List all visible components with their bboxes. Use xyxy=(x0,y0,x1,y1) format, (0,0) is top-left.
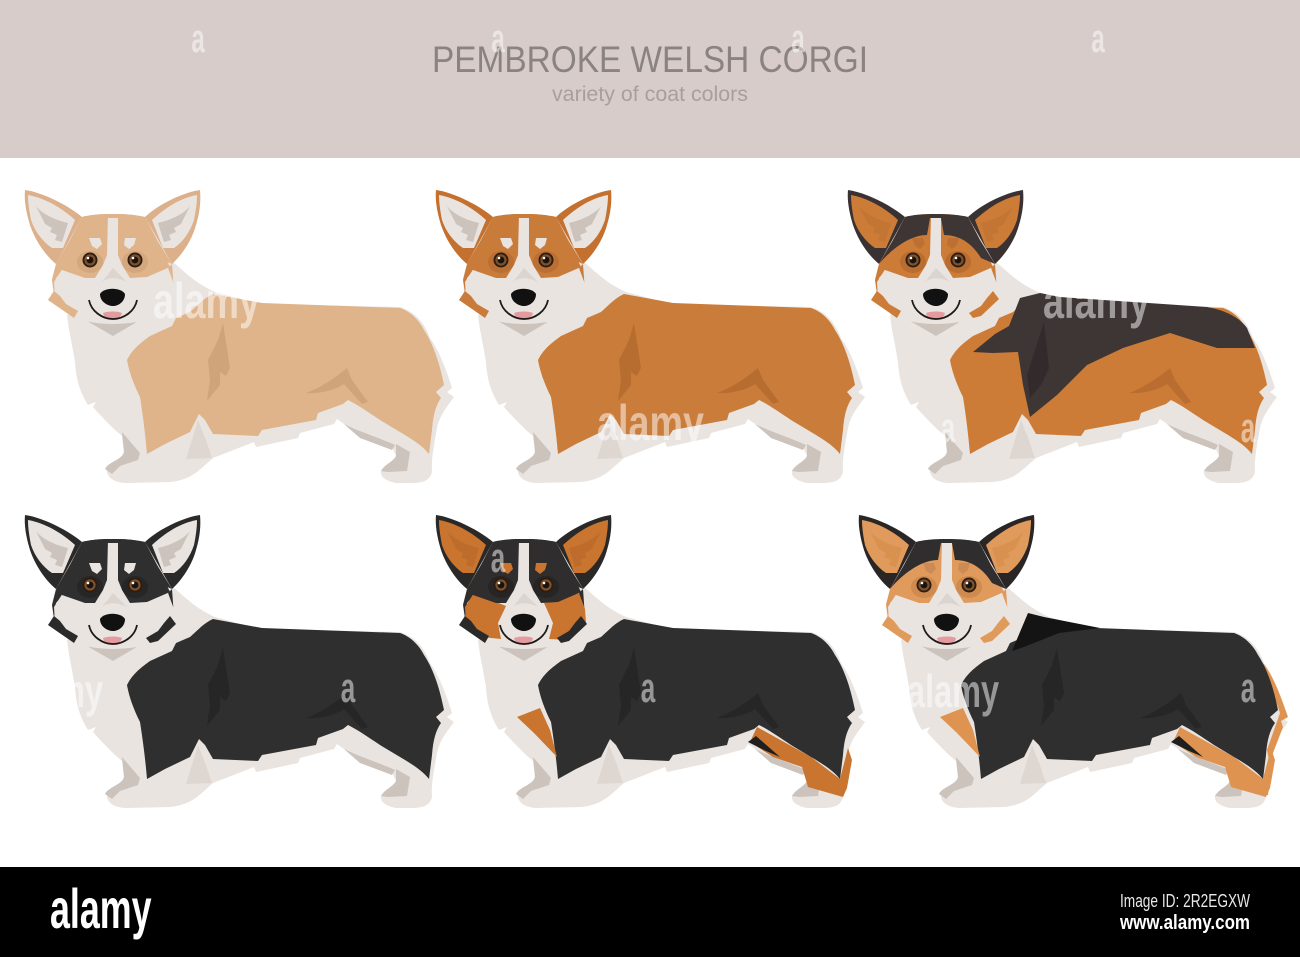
tan hind leg xyxy=(750,727,852,797)
black far leg sliver xyxy=(748,736,780,757)
watermark row: header xyxy=(191,16,1105,60)
watermark: large on dogs: alamy xyxy=(597,396,704,451)
coat xyxy=(950,294,1267,454)
watermark row: header: a xyxy=(491,16,505,60)
watermark row: small on dogs: a xyxy=(641,665,656,712)
white body xyxy=(67,587,454,808)
dog: red and white xyxy=(436,190,865,483)
watermark row: small on dogs: a xyxy=(941,405,956,452)
white body xyxy=(890,262,1277,483)
dog: tricolor light tan xyxy=(859,515,1288,808)
head xyxy=(25,515,200,661)
coat xyxy=(127,294,444,454)
tan chest patch xyxy=(940,708,980,757)
watermark: large on dogs: alamy xyxy=(11,667,103,717)
coat xyxy=(127,619,444,779)
black far leg sliver xyxy=(1171,736,1203,757)
footer logo: alamy xyxy=(50,877,152,940)
white body xyxy=(901,587,1288,808)
coat xyxy=(538,619,855,779)
head xyxy=(436,190,611,336)
tan hind leg xyxy=(1173,727,1275,797)
watermark: large on dogs: alamy xyxy=(907,667,999,717)
watermark row: header: a xyxy=(791,16,805,60)
head xyxy=(859,515,1034,661)
thigh shading xyxy=(1140,693,1202,729)
dog: tricolor dark tan xyxy=(436,515,865,808)
thigh shading xyxy=(306,368,368,404)
coat xyxy=(538,294,855,454)
head xyxy=(25,190,200,336)
dark saddle xyxy=(973,293,1255,417)
watermark row: small on dogs: a xyxy=(491,535,506,582)
watermark row: header: a xyxy=(1091,16,1105,60)
head xyxy=(436,515,611,661)
watermark: large on dogs xyxy=(11,274,1150,717)
watermark: large on dogs: alamy xyxy=(153,274,260,329)
thigh shading xyxy=(1129,368,1191,404)
shoulder shading xyxy=(207,323,230,401)
dog: fawn and white xyxy=(25,190,454,483)
head xyxy=(848,190,1023,336)
watermark row: small on dogs xyxy=(341,405,1256,712)
white body xyxy=(67,262,454,483)
tan rump edge xyxy=(1262,663,1288,795)
thigh shading xyxy=(717,693,779,729)
image id: Image ID: 2R2EGXW xyxy=(1120,891,1250,911)
thigh shading xyxy=(306,693,368,729)
header band xyxy=(0,0,1300,158)
dog: black and white xyxy=(25,515,454,808)
shoulder shading xyxy=(1041,648,1064,726)
watermark row: small on dogs: a xyxy=(1241,665,1256,712)
white body xyxy=(478,262,865,483)
shoulder shading xyxy=(618,648,641,726)
watermark row: small on dogs: a xyxy=(341,665,356,712)
title: PEMBROKE WELSH CORGI xyxy=(432,39,868,80)
thigh shading xyxy=(717,368,779,404)
website: www.alamy.com xyxy=(1119,912,1250,934)
footer bar xyxy=(0,867,1300,957)
tan chest patch xyxy=(517,708,557,757)
shoulder shading xyxy=(1027,322,1049,398)
stock watermarks xyxy=(11,16,1256,717)
coat xyxy=(961,619,1278,779)
subtitle: variety of coat colors xyxy=(552,83,748,106)
watermark: large on dogs: alamy xyxy=(1043,274,1150,329)
shoulder shading xyxy=(207,648,230,726)
watermark row: small on dogs: a xyxy=(1241,405,1256,452)
white body xyxy=(478,587,865,808)
dog: sable red with dark saddle xyxy=(848,190,1277,483)
shoulder shading xyxy=(618,323,641,401)
dark shoulder band xyxy=(1012,613,1100,651)
watermark row: header: a xyxy=(191,16,205,60)
